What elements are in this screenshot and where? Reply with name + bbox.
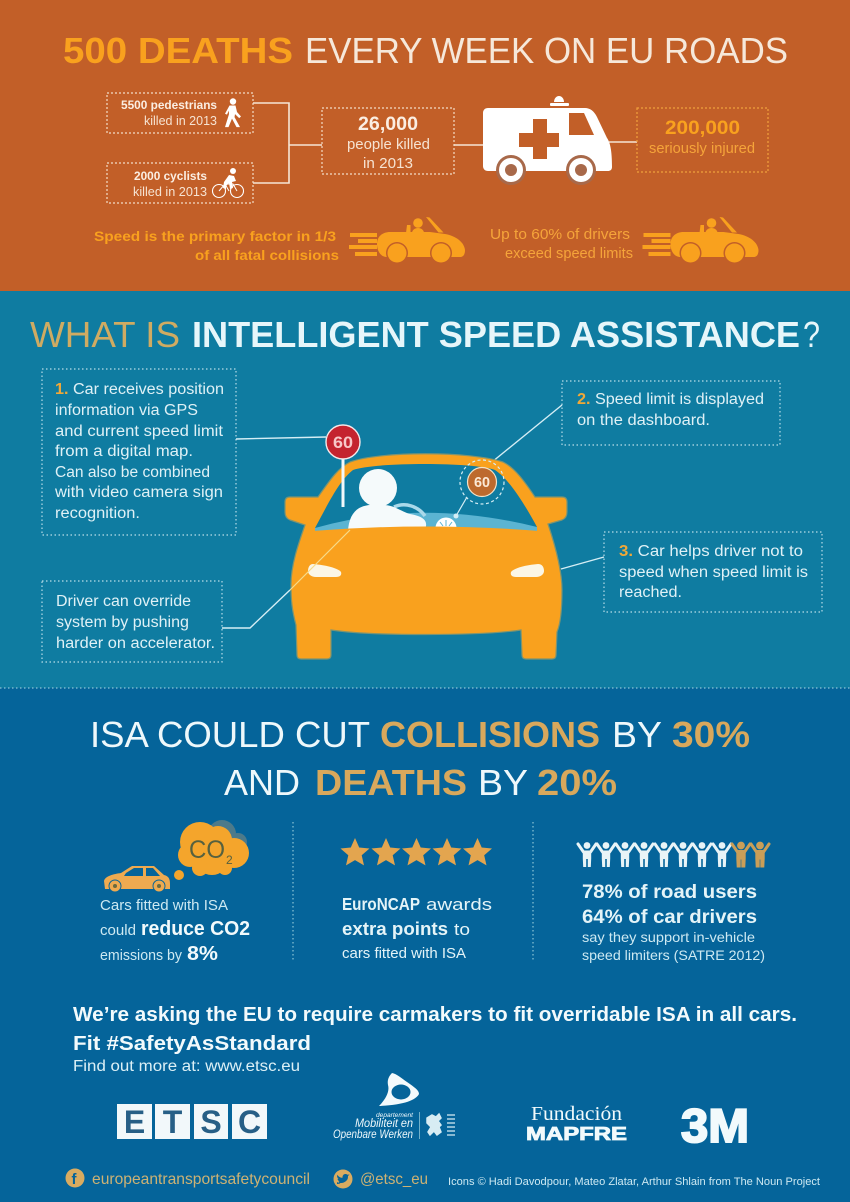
panel: driver override: Driver can override bbox=[56, 593, 191, 610]
steering wheel bbox=[394, 505, 425, 516]
call to action: We’re asking the EU to require carmakers to fit overridable ISA in all cars. bbox=[73, 1004, 797, 1026]
text: EuroNCAP: to bbox=[454, 920, 470, 939]
text: EuroNCAP: cars fitted with ISA bbox=[342, 946, 466, 962]
dashboard speed badge bbox=[454, 460, 504, 518]
panel: people killed bbox=[322, 108, 454, 174]
panel: cyclists: 2000 cyclists bbox=[134, 169, 207, 183]
heading: what is ISA: INTELLIGENT SPEED ASSISTANCE bbox=[192, 314, 800, 355]
text: CO2 reduction: reduce CO2 bbox=[141, 918, 250, 940]
logo: Fundacion MAPFRE bbox=[526, 1103, 627, 1144]
call to action bbox=[73, 1004, 797, 1075]
panel: step 3: speed when speed limit is bbox=[619, 564, 808, 581]
panel: step 1: recognition. bbox=[55, 505, 140, 522]
connector lines bbox=[253, 103, 637, 183]
panel: step 1: and current speed limit bbox=[55, 423, 224, 440]
text: speed primary factor: Speed is the primary factor in 1/3 bbox=[94, 228, 336, 244]
dashboard bbox=[315, 513, 537, 532]
dashboard speed badge: 60 bbox=[474, 475, 490, 491]
text: EuroNCAP: extra points bbox=[342, 919, 448, 939]
logo: ETSC bbox=[117, 1104, 267, 1140]
logo: ETSC: T bbox=[163, 1104, 183, 1140]
panel: step 3: 3. Car helps driver not to bbox=[619, 543, 803, 560]
panel: pedestrians: killed in 2013 bbox=[144, 114, 217, 128]
heading: ISA could cut: BY bbox=[478, 762, 528, 803]
logo: Mobiliteit en Openbare Werken bbox=[333, 1073, 455, 1141]
heading: ISA could cut: ISA COULD CUT bbox=[90, 714, 370, 755]
text: road users support: say they support in-vehicle bbox=[582, 929, 755, 945]
panel: people killed: people killed bbox=[347, 136, 430, 153]
logo: ETSC: E bbox=[124, 1104, 145, 1140]
column dividers bbox=[293, 822, 533, 960]
text: CO2 reduction: Cars fitted with ISA bbox=[100, 898, 228, 914]
social: facebook: f bbox=[72, 1171, 78, 1188]
panel: step 2 bbox=[562, 381, 780, 445]
logo: Mobiliteit en Openbare Werken: departement bbox=[376, 1112, 414, 1119]
panel: step 1: 1. Car receives position bbox=[55, 381, 224, 398]
call to action: Find out more at: www.etsc.eu bbox=[73, 1058, 300, 1075]
icon: pedestrian bbox=[225, 98, 241, 127]
text: CO2 reduction: 8% bbox=[187, 943, 218, 965]
panel: driver override: system by pushing bbox=[56, 614, 189, 631]
logo: ETSC: C bbox=[238, 1104, 261, 1140]
panel: seriously injured: seriously injured bbox=[649, 140, 755, 157]
icon: cyclist bbox=[212, 168, 244, 198]
driver bbox=[348, 469, 426, 531]
car body bbox=[285, 454, 567, 659]
cloud bbox=[174, 820, 249, 880]
icon: speeding car right bbox=[642, 217, 758, 264]
heading: ISA could cut: AND bbox=[224, 762, 300, 803]
text: exceed speed limits bbox=[490, 227, 633, 262]
heading: ISA could cut: BY bbox=[612, 714, 662, 755]
panel: people killed: 26,000 bbox=[358, 114, 418, 135]
logo: ETSC: S bbox=[200, 1104, 222, 1140]
panel: seriously injured: 200,000 bbox=[665, 118, 740, 139]
heading: ISA could cut: DEATHS bbox=[315, 762, 467, 803]
panel: step 3 bbox=[604, 532, 822, 612]
windscreen bbox=[315, 464, 537, 528]
text: road users support bbox=[582, 882, 765, 963]
panel: driver override bbox=[42, 581, 222, 662]
logo: Mobiliteit en Openbare Werken: Openbare Werken bbox=[333, 1129, 413, 1141]
panel: step 2: on the dashboard. bbox=[577, 412, 710, 429]
headlights bbox=[308, 564, 341, 577]
text: CO2 reduction: could bbox=[100, 923, 136, 939]
callout lines bbox=[222, 405, 604, 628]
text: road users support: 78% of road users bbox=[582, 882, 757, 903]
text: road users support: 64% of car drivers bbox=[582, 907, 757, 928]
illustration: car with driver bbox=[285, 425, 567, 659]
panel: step 1: Can also be combined bbox=[55, 464, 210, 481]
cloud: CO bbox=[189, 836, 225, 864]
social: twitter bbox=[334, 1170, 428, 1188]
logo: Fundacion MAPFRE: Fundación bbox=[531, 1103, 622, 1125]
logo: 3M: 3M bbox=[681, 1099, 749, 1152]
panel: pedestrians: 5500 pedestrians bbox=[121, 98, 217, 112]
panel: cyclists: killed in 2013 bbox=[133, 185, 207, 199]
text: speed primary factor: of all fatal collisions bbox=[195, 247, 339, 263]
panel: people killed: in 2013 bbox=[363, 155, 413, 172]
icon: CO2 cloud and car bbox=[104, 820, 249, 892]
text: road users support: speed limiters (SATRE 2012) bbox=[582, 947, 765, 963]
title bbox=[63, 30, 788, 71]
text: CO2 reduction bbox=[100, 898, 250, 965]
cloud: 2 bbox=[226, 853, 233, 867]
panel: driver override: harder on accelerator. bbox=[56, 635, 215, 652]
text: exceed speed limits: exceed speed limits bbox=[505, 246, 633, 262]
title: 500 DEATHS bbox=[63, 30, 293, 71]
speedometer bbox=[436, 518, 456, 528]
text: EuroNCAP bbox=[342, 894, 492, 962]
icon: five stars bbox=[340, 838, 492, 865]
text: speed primary factor bbox=[94, 228, 339, 263]
heading: what is ISA: WHAT IS bbox=[30, 314, 180, 355]
call to action: Fit #SafetyAsStandard bbox=[73, 1033, 311, 1055]
icon: speeding car left bbox=[349, 217, 465, 264]
car bbox=[104, 866, 170, 892]
panel: seriously injured bbox=[637, 108, 768, 172]
credits: Icons © Hadi Davodpour, Mateo Zlatar, Arthur Shlain from The Noun Project bbox=[448, 1176, 820, 1188]
text: CO2 reduction: emissions by bbox=[100, 948, 183, 964]
heading: ISA could cut: 30% bbox=[672, 714, 750, 755]
line over car body bbox=[290, 530, 350, 590]
panel: step 1: from a digital map. bbox=[55, 443, 193, 460]
text: exceed speed limits: Up to 60% of drivers bbox=[490, 227, 630, 243]
heading: ISA could cut bbox=[90, 714, 750, 803]
social: facebook: europeantransportsafetycouncil bbox=[92, 1171, 310, 1188]
speed limit sign bbox=[326, 425, 360, 507]
panel: pedestrians bbox=[107, 93, 253, 133]
panel: step 1: with video camera sign bbox=[54, 484, 223, 501]
title: EVERY WEEK ON EU ROADS bbox=[305, 30, 788, 71]
panel: step 2: 2. Speed limit is displayed bbox=[577, 391, 764, 408]
logo: Mobiliteit en Openbare Werken: Mobiliteit en bbox=[355, 1118, 413, 1130]
heading: what is ISA: ? bbox=[803, 314, 820, 355]
text: EuroNCAP: awards bbox=[426, 895, 492, 914]
speed limit sign: 60 bbox=[333, 433, 353, 452]
panel: cyclists bbox=[107, 163, 253, 203]
heading: ISA could cut: COLLISIONS bbox=[380, 714, 600, 755]
panel: step 1 bbox=[42, 369, 236, 535]
panel: step 3: reached. bbox=[619, 584, 682, 601]
hood bbox=[312, 526, 540, 548]
text: EuroNCAP: EuroNCAP bbox=[342, 894, 420, 914]
icon: ambulance bbox=[483, 96, 612, 185]
panel: step 1: information via GPS bbox=[55, 402, 198, 419]
heading: ISA could cut: 20% bbox=[537, 762, 617, 803]
icon: row of people bbox=[578, 842, 769, 867]
social: twitter: @etsc_eu bbox=[360, 1171, 428, 1188]
logo: Fundacion MAPFRE: MAPFRE bbox=[526, 1124, 627, 1144]
